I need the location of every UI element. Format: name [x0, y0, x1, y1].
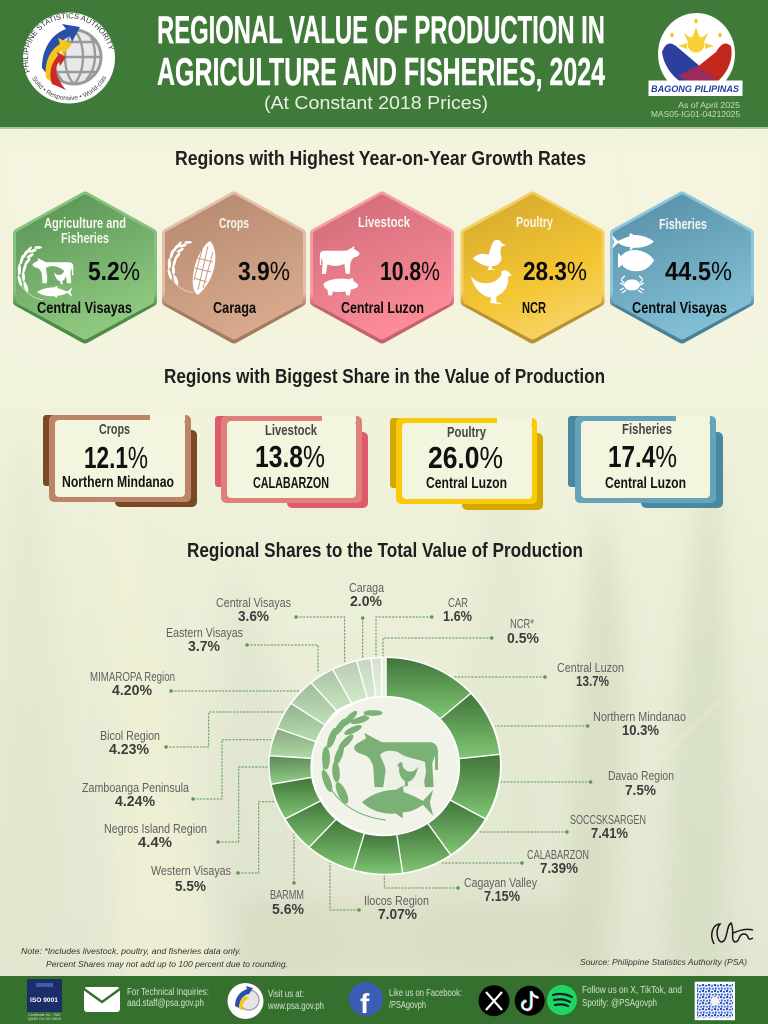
- release date and code: [651, 100, 740, 119]
- icon: wheat, cow, chicken and fish: [17, 246, 73, 300]
- website: Visit us at:: [268, 988, 304, 1000]
- hexagon: agriculture and fisheries: Agriculture and: [44, 215, 126, 232]
- labels: regions right: NCR*: [510, 616, 534, 631]
- icon: X: [478, 985, 510, 1016]
- labels: regions left and top: 2.0%: [350, 593, 382, 610]
- icon: wheat and corn: [167, 241, 215, 295]
- note: [21, 946, 288, 969]
- labels: regions right: 7.39%: [540, 860, 578, 877]
- logo: Philippine Statistics Authority: [22, 12, 115, 104]
- card: poultry: Poultry: [447, 424, 486, 441]
- labels: regions right: CALABARZON: [527, 847, 589, 862]
- labels: regions left and top: Central Visayas: [216, 595, 291, 610]
- logo: small PSA: [228, 983, 264, 1019]
- hexagon: livestock: Central Luzon: [341, 300, 424, 317]
- technical inquiries: aad.staff@psa.gov.ph: [127, 997, 204, 1009]
- note: Note: *Includes livestock, poultry, and fisheries data only.: [21, 946, 241, 956]
- card: livestock: CALABARZON: [253, 475, 329, 492]
- labels: regions left and top: Ilocos Region: [364, 893, 429, 908]
- QR code: [695, 982, 735, 1020]
- labels: regions right: 0.5%: [507, 630, 539, 647]
- card: fisheries: Central Luzon: [605, 475, 686, 492]
- card: crops: [43, 415, 197, 507]
- Facebook handle: Like us on Facebook:: [389, 987, 462, 999]
- hexagon: crops: Crops: [219, 215, 249, 232]
- icon: wheat, cow, chicken and fish emblem: [320, 710, 438, 820]
- labels: regions right: Davao Region: [608, 768, 674, 783]
- labels: regions left and top: MIMAROPA Region: [90, 669, 175, 684]
- labels: regions left and top: 5.6%: [272, 901, 304, 918]
- technical inquiries: [127, 986, 209, 1009]
- card: fisheries: [568, 416, 723, 508]
- header band: [0, 0, 768, 129]
- icon: Facebook: [349, 982, 383, 1019]
- ISO certification badge: QMS 04 00 0002: [28, 1017, 61, 1021]
- social media handle: Spotify: @PSAgovph: [582, 997, 657, 1009]
- labels: regions right: Central Luzon: [557, 660, 624, 675]
- icon: tuna, fish and crab: [612, 233, 654, 293]
- card: poultry: Central Luzon: [426, 475, 507, 492]
- hexagon: agriculture and fisheries: Central Visayas: [37, 300, 132, 317]
- labels: regions left and top: 5.5%: [175, 878, 206, 895]
- labels: regions right: [443, 595, 686, 905]
- hexagon: livestock: [315, 196, 449, 338]
- icon: cow and pig: [320, 246, 359, 295]
- hexagon: poultry: [466, 196, 600, 338]
- title: [157, 9, 605, 94]
- Facebook handle: [389, 987, 462, 1011]
- labels: regions left and top: 4.24%: [115, 793, 155, 810]
- ISO certification badge: ISO 9001: [30, 998, 59, 1004]
- labels: regions right: Cagayan Valley: [464, 875, 537, 890]
- hexagon: poultry: NCR: [522, 300, 546, 317]
- labels: regions right: CAR: [448, 595, 468, 610]
- labels: regions right: 7.15%: [484, 888, 520, 905]
- labels: regions right: SOCCSKSARGEN: [570, 812, 646, 827]
- hexagon: fisheries: Central Visayas: [632, 300, 727, 317]
- hexagon: poultry: Poultry: [516, 214, 553, 231]
- card: crops: 12.1%: [84, 440, 148, 475]
- hexagon: crops: Caraga: [213, 300, 256, 317]
- logo: Philippine Statistics Authority: PHILIPPINE STATISTICS AUTHORITY: [22, 13, 114, 73]
- heading: regional shares: Regional Shares to the Total Value of Production: [187, 540, 583, 562]
- Facebook handle: /PSAgovph: [389, 999, 426, 1011]
- icon: TikTok: [515, 986, 545, 1016]
- heading: growth rates: Regions with Highest Year-on-Year Growth Rates: [175, 148, 586, 170]
- labels: regions left and top: 3.6%: [238, 608, 269, 625]
- card: poultry: [390, 418, 543, 510]
- hexagon: livestock: Livestock: [358, 214, 410, 231]
- labels: regions left and top: Zamboanga Peninsula: [82, 780, 190, 795]
- card: fisheries: Fisheries: [622, 421, 672, 438]
- labels: regions left and top: [82, 580, 429, 923]
- card: poultry: 26.0%: [428, 440, 503, 475]
- labels: regions right: 1.6%: [443, 608, 472, 625]
- hexagon: agriculture and fisheries: [17, 196, 152, 338]
- hexagon: crops: 3.9%: [238, 256, 290, 286]
- hexagon: fisheries: Fisheries: [659, 216, 707, 233]
- source: Source: Philippine Statistics Authority (PSA): [580, 957, 747, 967]
- labels: regions right: 7.41%: [591, 825, 628, 842]
- note: Percent Shares may not add up to 100 percent due to rounding.: [46, 959, 288, 969]
- icon: envelope: [84, 987, 120, 1012]
- hexagon: fisheries: [612, 196, 749, 338]
- hexagon: livestock: 10.8%: [380, 256, 440, 286]
- icon: duck and chicken: [471, 240, 512, 304]
- labels: regions left and top: Negros Island Region: [104, 821, 207, 836]
- labels: regions left and top: 7.07%: [378, 906, 417, 923]
- social media handle: [582, 984, 682, 1009]
- release date and code: MAS05-IG01-04212025: [651, 109, 740, 119]
- logo: Bagong Pilipinas: [648, 13, 742, 96]
- labels: regions right: 13.7%: [576, 673, 609, 690]
- card: livestock: 13.8%: [255, 439, 325, 474]
- labels: regions right: 10.3%: [622, 722, 659, 739]
- labels: regions left and top: Eastern Visayas: [166, 625, 243, 640]
- leader lines: [164, 615, 592, 912]
- heading: biggest share: Regions with Biggest Share in the Value of Production: [164, 366, 605, 388]
- hexagon: poultry: 28.3%: [523, 256, 587, 286]
- subtitle: (At Constant 2018 Prices): [264, 93, 488, 113]
- signature: [712, 923, 753, 944]
- labels: regions right: 7.5%: [625, 782, 656, 799]
- ISO certification badge: [27, 979, 62, 1021]
- website: [267, 988, 324, 1012]
- release date and code: As of April 2025: [678, 100, 740, 110]
- card: crops: Northern Mindanao: [62, 474, 174, 491]
- labels: regions left and top: 4.20%: [112, 682, 152, 699]
- website: www.psa.gov.ph: [267, 1000, 324, 1012]
- labels: regions left and top: Western Visayas: [151, 863, 231, 878]
- card: livestock: [215, 416, 368, 508]
- labels: regions left and top: 4.4%: [138, 834, 172, 851]
- labels: regions left and top: Caraga: [349, 580, 385, 595]
- ISO certification badge: Certificate No. 7587: [28, 1013, 61, 1017]
- social media handle: Follow us on X, TikTok, and: [582, 984, 682, 996]
- icon: Spotify: [547, 985, 577, 1015]
- labels: regions left and top: Bicol Region: [100, 728, 160, 743]
- labels: regions left and top: 3.7%: [188, 638, 220, 655]
- card: livestock: Livestock: [265, 422, 317, 439]
- footer band: [0, 976, 768, 1024]
- card: crops: Crops: [99, 421, 130, 438]
- card: fisheries: 17.4%: [608, 439, 677, 474]
- hexagon: crops: [167, 196, 301, 338]
- technical inquiries: For Technical Inquiries:: [127, 986, 209, 998]
- labels: regions right: Northern Mindanao: [593, 709, 686, 724]
- hexagon: fisheries: 44.5%: [665, 256, 732, 286]
- labels: regions left and top: 4.23%: [109, 741, 149, 758]
- labels: regions left and top: BARMM: [270, 887, 304, 902]
- icon: Facebook: f: [360, 988, 370, 1019]
- logo: Bagong Pilipinas: BAGONG PILIPINAS: [651, 84, 740, 95]
- hexagon: agriculture and fisheries: Fisheries: [61, 230, 109, 247]
- donut chart: [269, 656, 502, 876]
- hexagon: agriculture and fisheries: 5.2%: [88, 256, 140, 286]
